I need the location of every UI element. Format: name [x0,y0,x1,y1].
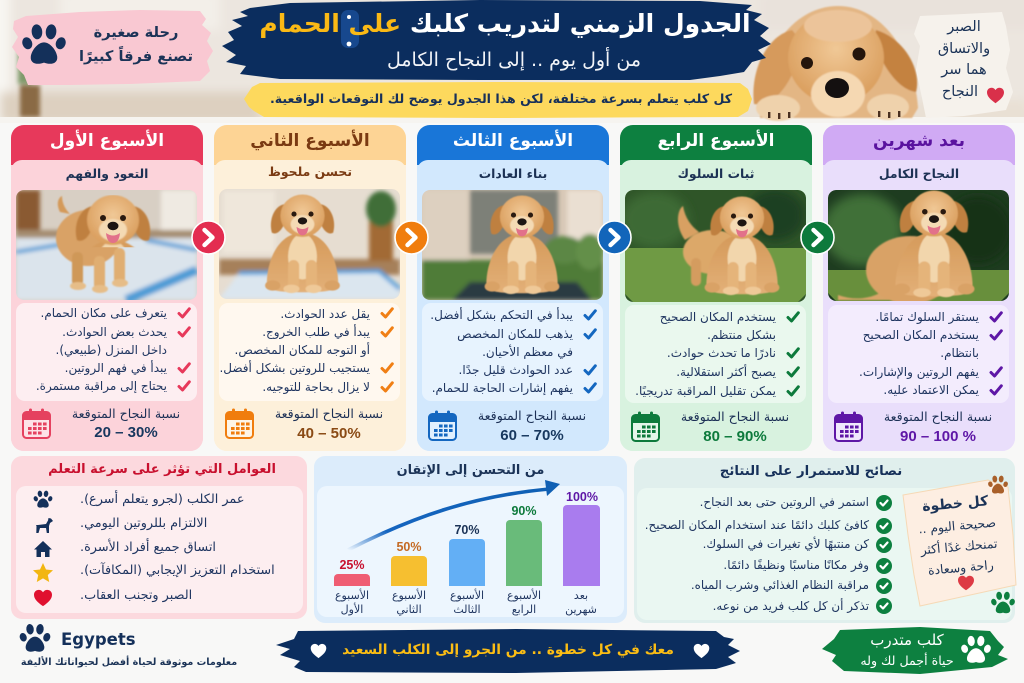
badge text [846,630,968,671]
badge text: تصنع فرقاً كبيرًا [79,48,193,65]
checklist: لا يزال بحاجة للتوجيه. [262,380,370,394]
note text: والاتساق [938,40,990,56]
checklist: بشكل منتظم. [707,328,776,342]
arrow: week 4 to final [800,221,835,254]
expected success: 80 – 90% [703,428,767,445]
checklist: يستقر السلوك تمامًا. [875,310,979,324]
photo: adult dog on grass [828,190,1009,301]
expected success: نسبة النجاح المتوقعة [884,409,992,424]
tips list: تذكر أن كل كلب فريد من نوعه. [713,599,869,613]
checklist [36,306,191,394]
note text [902,489,1014,582]
checklist: يذهب للمكان المخصص [457,327,573,341]
checklist: يبدأ في التحكم بشكل أفضل. [430,308,573,322]
tips list: استمر في الروتين حتى بعد النجاح. [700,495,869,509]
factor: patience: الصبر وتجنب العقاب. [80,588,192,603]
green badge: trained dog [820,627,1010,675]
arrow: growth trend [344,480,569,556]
card subtitle: التعود والفهم [66,166,148,181]
bar chart: 90% [511,504,537,518]
bar chart: الأسبوع [335,589,369,602]
title banner [222,0,771,80]
card subtitle: ثبات السلوك [678,166,754,181]
checklist: يستخدم المكان الصحيح [863,328,979,342]
factor: dog age: عمر الكلب (لجرو يتعلم أسرع). [80,492,244,507]
expected success: نسبة النجاح المتوقعة [681,409,789,424]
tips list: كن منتبهًا لأي تغيرات في السلوك. [703,537,869,551]
panel heading: نصائح للاستمرار على النتائج [720,464,902,479]
card: after two months [823,125,1015,451]
icon: heart [34,590,52,606]
checklist: يفهم إشارات الحاجة للحمام. [432,381,573,395]
icon: heart left [310,643,327,659]
expected success: نسبة النجاح المتوقعة [275,406,383,421]
expected success: نسبة النجاح المتوقعة [72,406,180,421]
bar chart: الأول [341,603,363,616]
bar chart: 25% [339,558,365,572]
intro text: كل كلب يتعلم بسرعة مختلفة، لكن هذا الجدول يوضح لك التوقعات الواقعية. [270,91,732,106]
icon: heart [957,575,975,591]
card header [620,125,812,165]
note text: النجاح [942,82,978,100]
note text: تمنحك غدًا أكثر [920,536,998,557]
bar chart: 70% [454,523,480,537]
card header [214,125,406,165]
card header: الأسبوع الأول [50,131,164,151]
icon: brown paw [988,475,1008,495]
icon: star [33,563,53,582]
checklist: يصبح أكثر استقلالية. [676,365,776,379]
factor: positive reinforcement: استخدام التعزيز الإيجابي (المكافآت). [80,563,275,578]
bar chart: 50% [396,540,422,554]
checklist: يبدأ في فهم الروتين. [65,361,167,375]
panel: progress to mastery chart [314,456,627,623]
bar chart [314,486,627,623]
hero background photo [0,0,1024,117]
card header: بعد شهرين [873,131,965,151]
icon: calendar [22,408,51,439]
icon: heart [987,88,1004,104]
heading: الجدول الزمني لتدريب كلبك على الحمام [259,9,751,38]
expected success [681,409,789,445]
icon: paw [22,24,66,64]
expected success: نسبة النجاح المتوقعة [478,408,586,423]
card header [11,125,203,165]
note text: هما سر [941,61,987,78]
factor: daily routine: الالتزام بللروتين اليومي. [80,516,207,531]
expected success [72,406,180,441]
card header [823,125,1015,165]
badge text [79,24,193,65]
checklist: يفهم الروتين والإشارات. [859,365,979,379]
bar chart: الأسبوع [450,589,484,602]
sparkle blob on title [341,10,359,48]
expected success: 40 – 50% [297,425,361,442]
footer banner [276,629,740,673]
note: patience and consistency [914,12,1013,117]
tips list: مراقبة النظام الغذائي وشرب المياه. [691,578,869,592]
tips list [634,488,1015,618]
chart heading: من التحسن إلى الإتقان [397,463,544,478]
icon: calendar [225,408,254,439]
note text: الصبر [947,18,981,35]
checklist: يحدث بعض الحوادث. [62,325,167,339]
photo: puppy sitting on pad [219,189,400,299]
expected success: 60 – 70% [500,427,564,444]
expected success [478,408,586,444]
checklist: يستخدم المكان الصحيح [660,310,776,324]
bar chart: بعد [574,589,588,602]
checklist: بانتظام. [940,346,979,360]
icon: calendar [631,412,660,442]
checklist: يمكن الاعتماد عليه. [883,383,979,397]
pink badge: small journey [12,10,213,85]
card: week 2 [214,125,406,451]
arrow: week 3 to 4 [597,221,632,254]
card header: الأسبوع الرابع [658,131,774,151]
subtitle: من أول يوم .. إلى النجاح الكامل [387,49,641,71]
icon: dog [34,518,53,533]
bar chart: 100% [566,490,598,504]
yellow intro strip [244,82,752,118]
card header: الأسبوع الثالث [453,131,573,151]
note: every healthy step [900,475,1020,610]
banner text: معك في كل خطوة .. من الجرو إلى الكلب السعيد [342,642,674,658]
panel heading: العوامل التي تؤثر على سرعة التعلم [48,462,276,477]
icon: green paw [991,591,1015,615]
factor: family consistency: اتساق جميع أفراد الأسرة. [80,540,216,555]
badge text: حياة أجمل لك وله [860,653,954,668]
card: week 3 [417,125,609,451]
expected success: 20 – 30% [94,424,158,441]
expected success: 90 – 100 % [900,428,976,445]
checklist: نادرًا ما تحدث حوادث. [667,346,776,360]
bar chart: الثاني [396,603,422,616]
logo [18,622,243,674]
checklist [219,307,394,394]
note text: صحيحة اليوم .. [918,515,996,536]
arrow: week 1 to 2 [191,221,226,254]
checklist: يقل عدد الحوادث. [280,307,370,321]
photo: puppy running on grass [625,190,806,302]
checklist: يبدأ في طلب الخروج. [262,325,370,339]
icon: calendar [834,412,863,442]
checklist: داخل المنزل (طبيعي). [56,343,167,357]
arrow: week 2 to 3 [394,221,429,254]
expected success [275,406,383,442]
checklist [430,307,597,396]
icon: heart right [693,643,710,659]
icon: calendar [428,410,457,441]
bar chart: الأسبوع [507,589,541,602]
brand name: Egypets [61,630,136,649]
bar chart: الثالث [453,603,481,616]
checklist: يتعرف على مكان الحمام. [40,306,167,320]
card subtitle: النجاح الكامل [879,166,959,181]
note text: كل خطوة [922,493,989,515]
checklist: يستجيب للروتين بشكل أفضل. [219,361,370,375]
checklist: عدد الحوادث قليل جدًا. [459,363,573,377]
checklist: في معظم الأحيان. [482,345,573,359]
icon: white paw [961,635,991,665]
tips list: كافئ كلبك دائمًا عند استخدام المكان الصحيح. [645,518,869,532]
bar chart: شهرين [565,603,597,616]
bar chart: الرابع [512,603,536,616]
note text: راحة وسعادة [927,557,994,578]
panel: learning speed factors [11,456,307,619]
tagline: معلومات موثوقة لحياة أفضل لحيواناتك الأليفة [21,657,237,668]
card header: الأسبوع الثاني [250,131,370,151]
card subtitle: تحسن ملحوظ [268,164,352,179]
checklist: يحتاج إلى مراقبة مستمرة. [36,379,167,393]
photo: puppy on porch mat [422,190,603,300]
expected success [884,409,992,445]
badge text: كلب متدرب [870,631,944,649]
icon: logo paw [19,623,51,654]
card header [417,125,609,165]
icon: paw [34,490,52,508]
hero puppy illustration [752,5,919,122]
card: week 1 [11,125,203,451]
card subtitle: بناء العادات [479,166,547,181]
tips list: وفر مكانًا مناسبًا ونظيفًا دائمًا. [723,558,869,572]
icon: house [34,541,52,557]
checklist [859,310,1003,397]
checklist [635,310,800,398]
badge text: رحلة صغيرة [94,24,178,41]
checklist: أو التوجه للمكان المخصص. [234,343,370,357]
panel: tips for sustaining results [634,458,1015,623]
card: week 4 [620,125,812,451]
photo: puppy on training pad [16,190,197,300]
note text [938,18,990,100]
checklist: يمكن تقليل المراقبة تدريجيًا. [635,384,776,398]
bar chart: الأسبوع [392,589,426,602]
